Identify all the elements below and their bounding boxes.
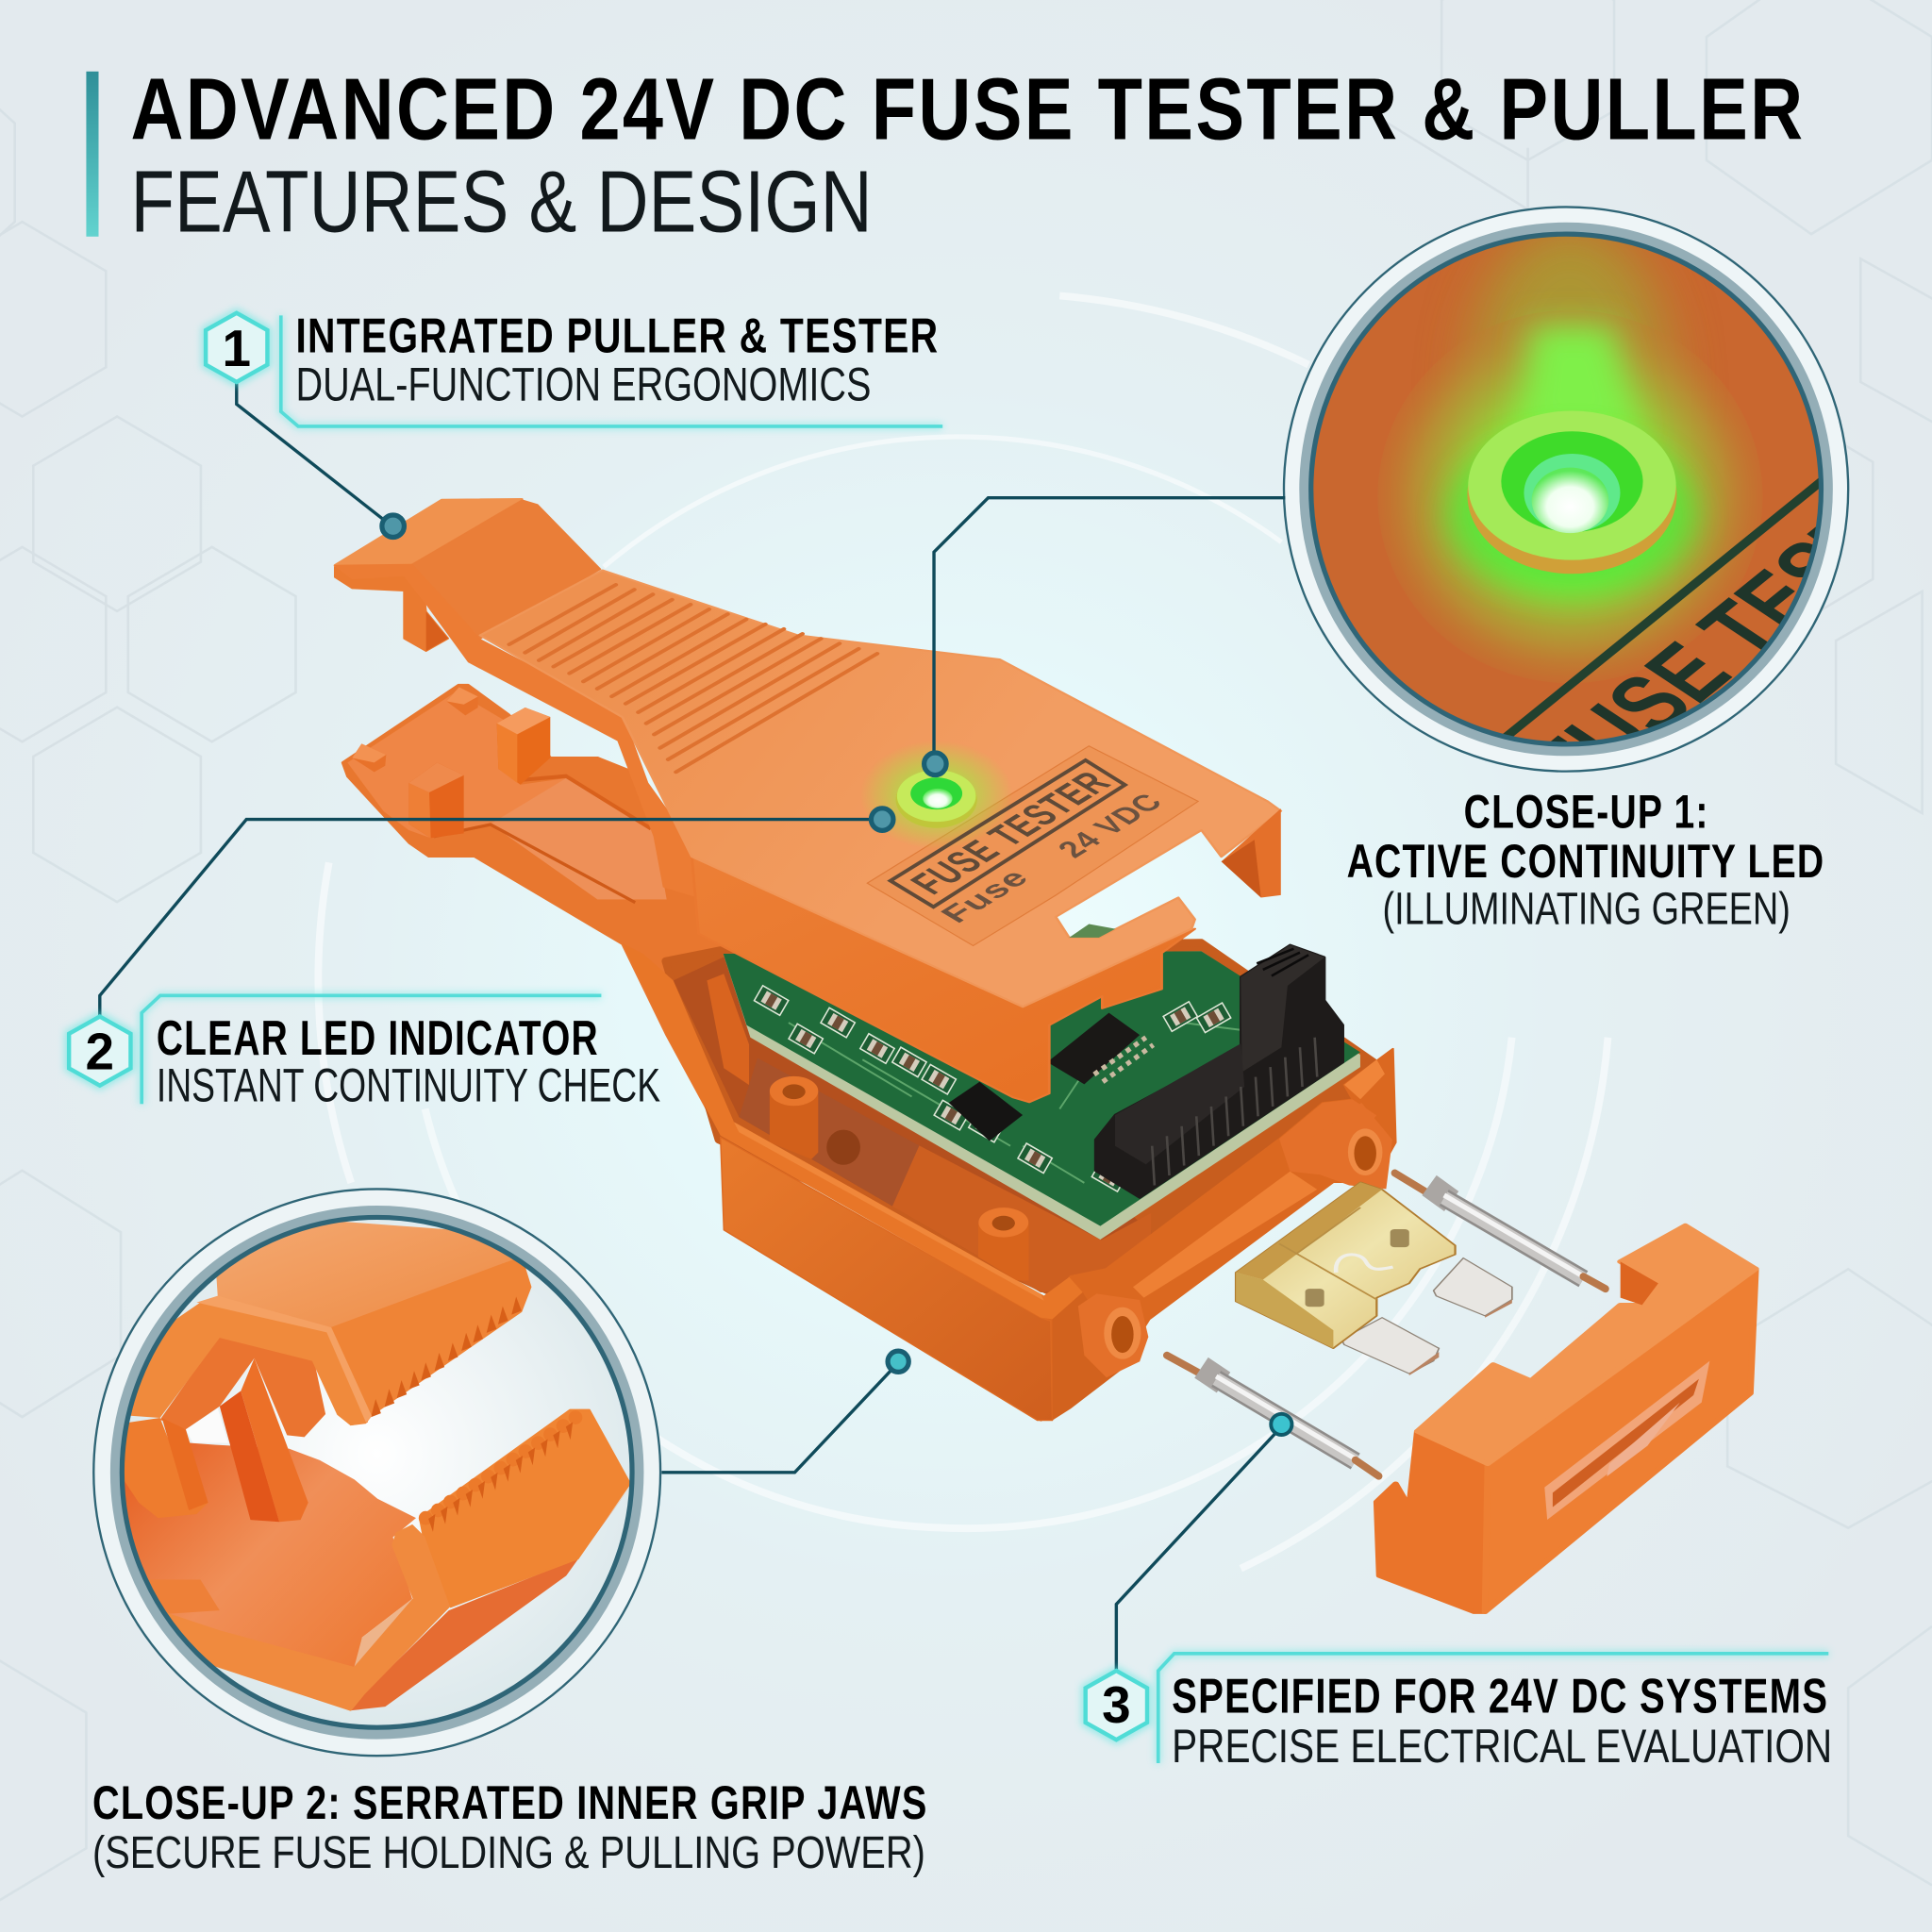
leader: callout 1 <box>237 382 404 537</box>
upper jaw top <box>216 1220 522 1329</box>
title accent bar <box>86 72 98 237</box>
product: exploded fuse tester <box>335 499 1756 1612</box>
screw ears <box>1078 1103 1392 1377</box>
interior screw post front <box>978 1224 1029 1280</box>
callout 2 subtext: INSTANT CONTINUITY CHECK <box>157 1059 660 1112</box>
callout 2 accent line <box>142 995 601 1104</box>
callout 3 number badge: 3 <box>1102 1675 1131 1734</box>
contact pin upper <box>1395 1173 1606 1289</box>
close-up 2 caption: (SECURE FUSE HOLDING & PULLING POWER) <box>92 1827 925 1878</box>
callout 1 heading: INTEGRATED PULLER & TESTER <box>295 309 939 364</box>
LED lens <box>1532 468 1608 533</box>
callout 2 <box>69 995 660 1112</box>
leader: close-up 2 to housing <box>661 1351 908 1473</box>
upper jaw front with teeth <box>331 1259 532 1426</box>
end cap <box>1376 1225 1756 1612</box>
callout 1 accent line <box>281 315 942 426</box>
handle knobs <box>446 687 478 715</box>
close-up 2 caption <box>92 1776 928 1878</box>
LED glow on surface <box>1383 359 1757 679</box>
close-up 1 caption: (ILLUMINATING GREEN) <box>1382 884 1790 935</box>
leader: callout 3 <box>1116 1414 1291 1671</box>
connector block with knob <box>1095 945 1343 1198</box>
lower jaw front with teeth <box>420 1410 630 1607</box>
cover label: FUSE TESTER: FUSE TESTER <box>901 765 1121 901</box>
cover label: FUSE TESTER: 24 VDC <box>1050 789 1171 862</box>
contact pin lower <box>1167 1356 1379 1476</box>
label recess <box>867 746 1198 946</box>
blade fuse <box>1236 1182 1512 1375</box>
LED bezel <box>1467 485 1677 574</box>
housing front-left face and rim <box>623 943 1128 1421</box>
circuit board <box>724 951 1360 1240</box>
leader: callout 2 <box>100 808 893 1017</box>
subtitle: FEATURES & DESIGN <box>130 153 873 251</box>
lower jaw underside <box>351 1491 628 1711</box>
left post <box>125 1418 208 1518</box>
close-up 1: active LED <box>1283 206 1849 773</box>
handle post rear <box>497 708 550 785</box>
cover label: FUSE TESTER: Fuse <box>933 864 1037 928</box>
close-up 1 caption: CLOSE-UP 1: <box>1464 786 1709 839</box>
grip ribs <box>509 585 877 772</box>
close-up 2 caption: CLOSE-UP 2: SERRATED INNER GRIP JAWS <box>92 1776 928 1829</box>
callout 2 number badge: 2 <box>86 1023 114 1081</box>
LED indicator <box>860 741 1013 849</box>
cover top face <box>480 571 1281 1007</box>
callout 2 heading: CLEAR LED INDICATOR <box>157 1011 599 1066</box>
lower jaw rim <box>162 1525 449 1709</box>
close-up 1 caption <box>1347 786 1824 935</box>
window through frame <box>186 1408 228 1443</box>
interior screw post rear <box>770 1091 818 1159</box>
callout 3 <box>1086 1654 1832 1773</box>
LED well <box>1501 431 1643 532</box>
lower handle silhouette <box>342 685 789 1135</box>
lower jaw floor <box>108 1443 416 1668</box>
lever tip and slope <box>335 499 695 896</box>
printed label fragment: FUSE TEST <box>1507 494 1915 811</box>
cover label: FUSE TESTER <box>891 760 1171 928</box>
callout 3 number badge <box>1086 1671 1147 1740</box>
callout 1 number badge <box>206 313 267 382</box>
olive light spread <box>1451 236 1690 376</box>
background concentric arcs <box>318 295 1607 1569</box>
close-up 2: serrated jaws <box>93 1189 660 1756</box>
slot highlight <box>1069 924 1115 938</box>
callout 3 accent line <box>1158 1654 1828 1763</box>
cover front face <box>691 857 1195 1102</box>
U frame <box>108 1303 368 1425</box>
floor opening near lip <box>355 1599 412 1666</box>
callout 1 <box>206 309 942 426</box>
callout 2 number badge <box>69 1017 130 1086</box>
green light beam <box>1520 325 1640 437</box>
top cover and lever <box>480 571 1281 1102</box>
handle post front <box>408 762 464 838</box>
callout 1 number badge: 1 <box>223 319 251 377</box>
title block <box>86 60 1805 251</box>
callout 1 subtext: DUAL-FUNCTION ERGONOMICS <box>295 358 871 410</box>
housing right wall <box>998 1049 1395 1421</box>
right prong <box>1222 808 1281 897</box>
housing interior <box>674 957 1151 1292</box>
printed border line <box>1503 477 1819 736</box>
right pillar <box>220 1391 279 1522</box>
leader: close-up 1 to LED <box>924 498 1285 775</box>
lower handle details <box>347 687 667 903</box>
housing interior base <box>665 942 1374 1296</box>
back panel <box>160 1335 325 1437</box>
